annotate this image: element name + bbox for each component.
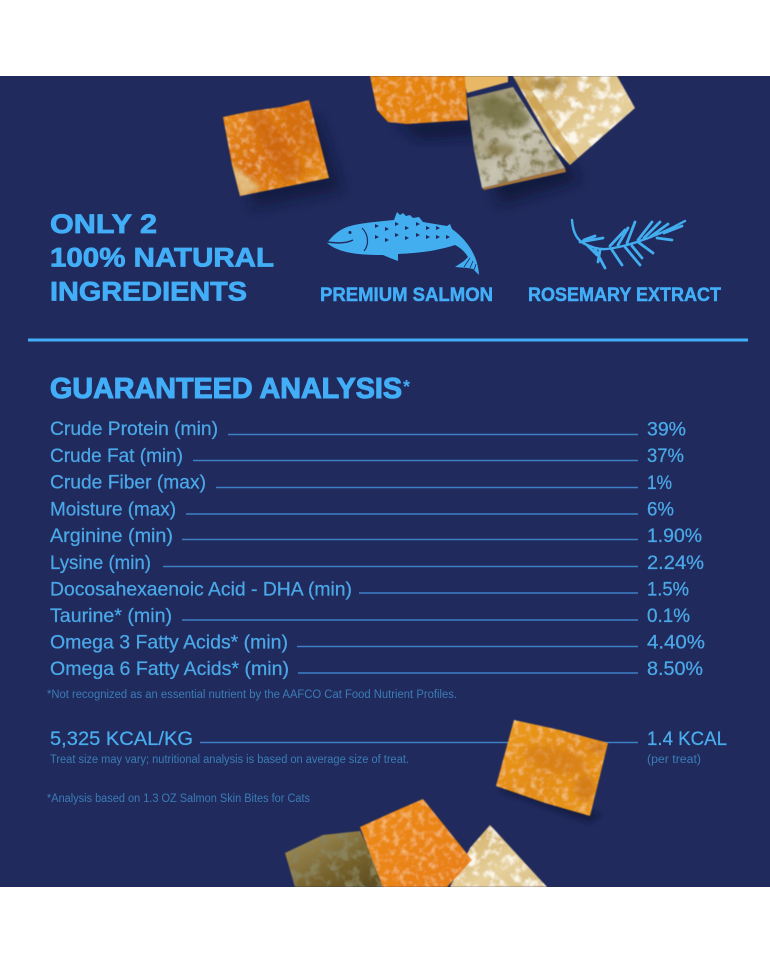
row: arginine [50,525,702,547]
treats: top cluster [223,76,635,208]
row: taurine: 0.1% [647,605,690,627]
row: crude fiber: 1% [647,472,672,494]
heading: only 2 ingredients: INGREDIENTS [50,276,247,306]
row: taurine [50,605,690,627]
label: rosemary extract: ROSEMARY EXTRACT [528,285,721,306]
row: moisture [50,498,674,520]
heading: only 2 ingredients [50,209,274,306]
heading: guaranteed analysis: * [403,377,410,397]
row: crude fat: Crude Fat (min) [50,445,183,467]
row: lysine: Lysine (min) [50,552,151,574]
row: taurine: Taurine* (min) [50,605,172,627]
row: moisture: Moisture (max) [50,498,176,520]
footnote: AAFCO: *Not recognized as an essential nutrient by the AAFCO Cat Food Nutrient Profiles. [47,689,457,701]
row: crude protein [50,418,686,440]
note: treat size: Treat size may vary; nutritional analysis is based on average size of treat. [50,754,409,766]
heading: only 2 ingredients: 100% NATURAL [50,242,274,272]
row: omega 6 [50,658,703,680]
row: crude fat [50,445,684,467]
label: premium salmon: PREMIUM SALMON [320,285,493,306]
calories row: 1.4 KCAL [647,728,727,750]
heading: only 2 ingredients: ONLY 2 [50,209,157,239]
calories row [50,728,727,766]
row: lysine: 2.24% [647,552,704,574]
row: DHA: 1.5% [647,578,689,600]
row: moisture: 6% [647,498,674,520]
row: DHA [50,578,689,600]
calories row: 5,325 KCAL/KG [50,728,193,750]
row: crude fiber [50,472,672,494]
icon: salmon [327,212,479,275]
calories row: (per treat) [647,754,701,766]
row: arginine: Arginine (min) [50,525,173,547]
row: omega 3: 4.40% [647,632,705,654]
row: omega 3: Omega 3 Fatty Acids* (min) [50,632,288,654]
row: lysine [50,552,704,574]
row: arginine: 1.90% [647,525,702,547]
heading: guaranteed analysis: GUARANTEED ANALYSIS [50,373,402,405]
row: DHA: Docosahexaenoic Acid - DHA (min) [50,578,352,600]
treats: bottom cluster [285,799,547,887]
row: omega 6: Omega 6 Fatty Acids* (min) [50,658,289,680]
row: crude fat: 37% [647,445,684,467]
row: crude protein: Crude Protein (min) [50,418,218,440]
icon: rosemary [572,220,685,268]
analysis table [50,418,705,680]
row: omega 3 [50,632,705,654]
row: omega 6: 8.50% [647,658,703,680]
treat: single orange piece [496,720,608,822]
row: crude protein: 39% [647,418,686,440]
note: analysis basis: *Analysis based on 1.3 OZ Salmon Skin Bites for Cats [47,793,310,805]
row: crude fiber: Crude Fiber (max) [50,472,206,494]
